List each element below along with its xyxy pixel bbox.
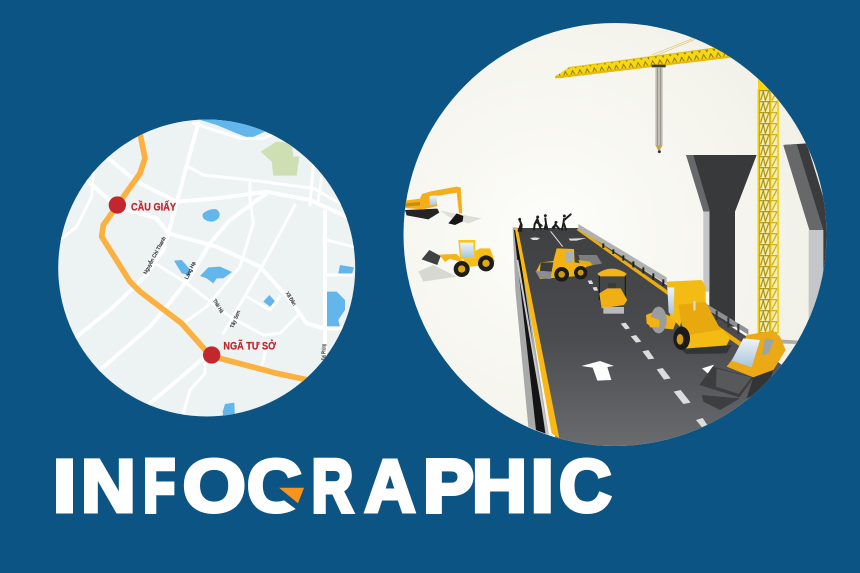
label: Cầu Giấy: CẦU GIẤY — [131, 201, 177, 214]
title: H — [472, 444, 527, 528]
pier one — [686, 155, 757, 327]
marker: Ngã Tư Sở — [203, 346, 220, 364]
route line — [102, 133, 308, 380]
icon: orange triangle — [279, 488, 304, 503]
guard rail — [578, 224, 798, 344]
title: R — [312, 444, 353, 528]
title: C — [559, 444, 612, 528]
street labels: Tây Sơn — [230, 310, 242, 329]
left yellow edge — [515, 228, 559, 438]
wheel loader on road — [535, 248, 602, 282]
title: N — [81, 444, 136, 528]
street labels: Thái Hà — [211, 298, 224, 314]
pier two — [783, 143, 826, 320]
crane jib — [555, 38, 732, 78]
road arrow — [581, 361, 614, 381]
title: I — [53, 444, 76, 528]
title: G — [247, 444, 305, 528]
crane hook — [655, 67, 663, 153]
street labels: Xã Đàn — [284, 291, 297, 307]
map base — [58, 119, 356, 417]
title G notch — [270, 482, 310, 516]
street labels: Đại Phùng — [321, 344, 327, 360]
panel: construction scene — [403, 22, 833, 453]
title — [53, 444, 611, 528]
street labels — [142, 236, 327, 360]
road surface — [518, 228, 782, 446]
bridge side rails — [514, 230, 545, 433]
wheel loader left — [418, 240, 495, 282]
street labels: Nguyễn Chí Thanh — [142, 236, 168, 276]
marker: Cầu Giấy — [109, 196, 126, 214]
large road roller — [646, 280, 732, 354]
excavator — [405, 187, 482, 225]
workers — [518, 214, 571, 231]
title: O — [183, 444, 246, 528]
front loader — [699, 331, 786, 410]
title: F — [144, 444, 175, 528]
map water bodies — [174, 117, 354, 418]
infographic canvas — [56, 23, 826, 514]
right yellow edge — [577, 228, 743, 347]
lane markings — [530, 231, 708, 427]
bridge side — [513, 227, 549, 437]
map roads — [60, 123, 353, 413]
small road roller — [597, 269, 627, 314]
label: Ngã Tư Sở: NGÃ TƯ SỞ — [223, 339, 277, 352]
crane mast — [758, 78, 779, 334]
scene background — [403, 22, 827, 446]
panel: route map — [58, 117, 356, 418]
title: I — [530, 444, 554, 528]
street labels: Láng Hạ — [184, 261, 197, 281]
map park — [261, 142, 299, 176]
title: P — [424, 444, 474, 528]
title: A — [364, 444, 416, 528]
